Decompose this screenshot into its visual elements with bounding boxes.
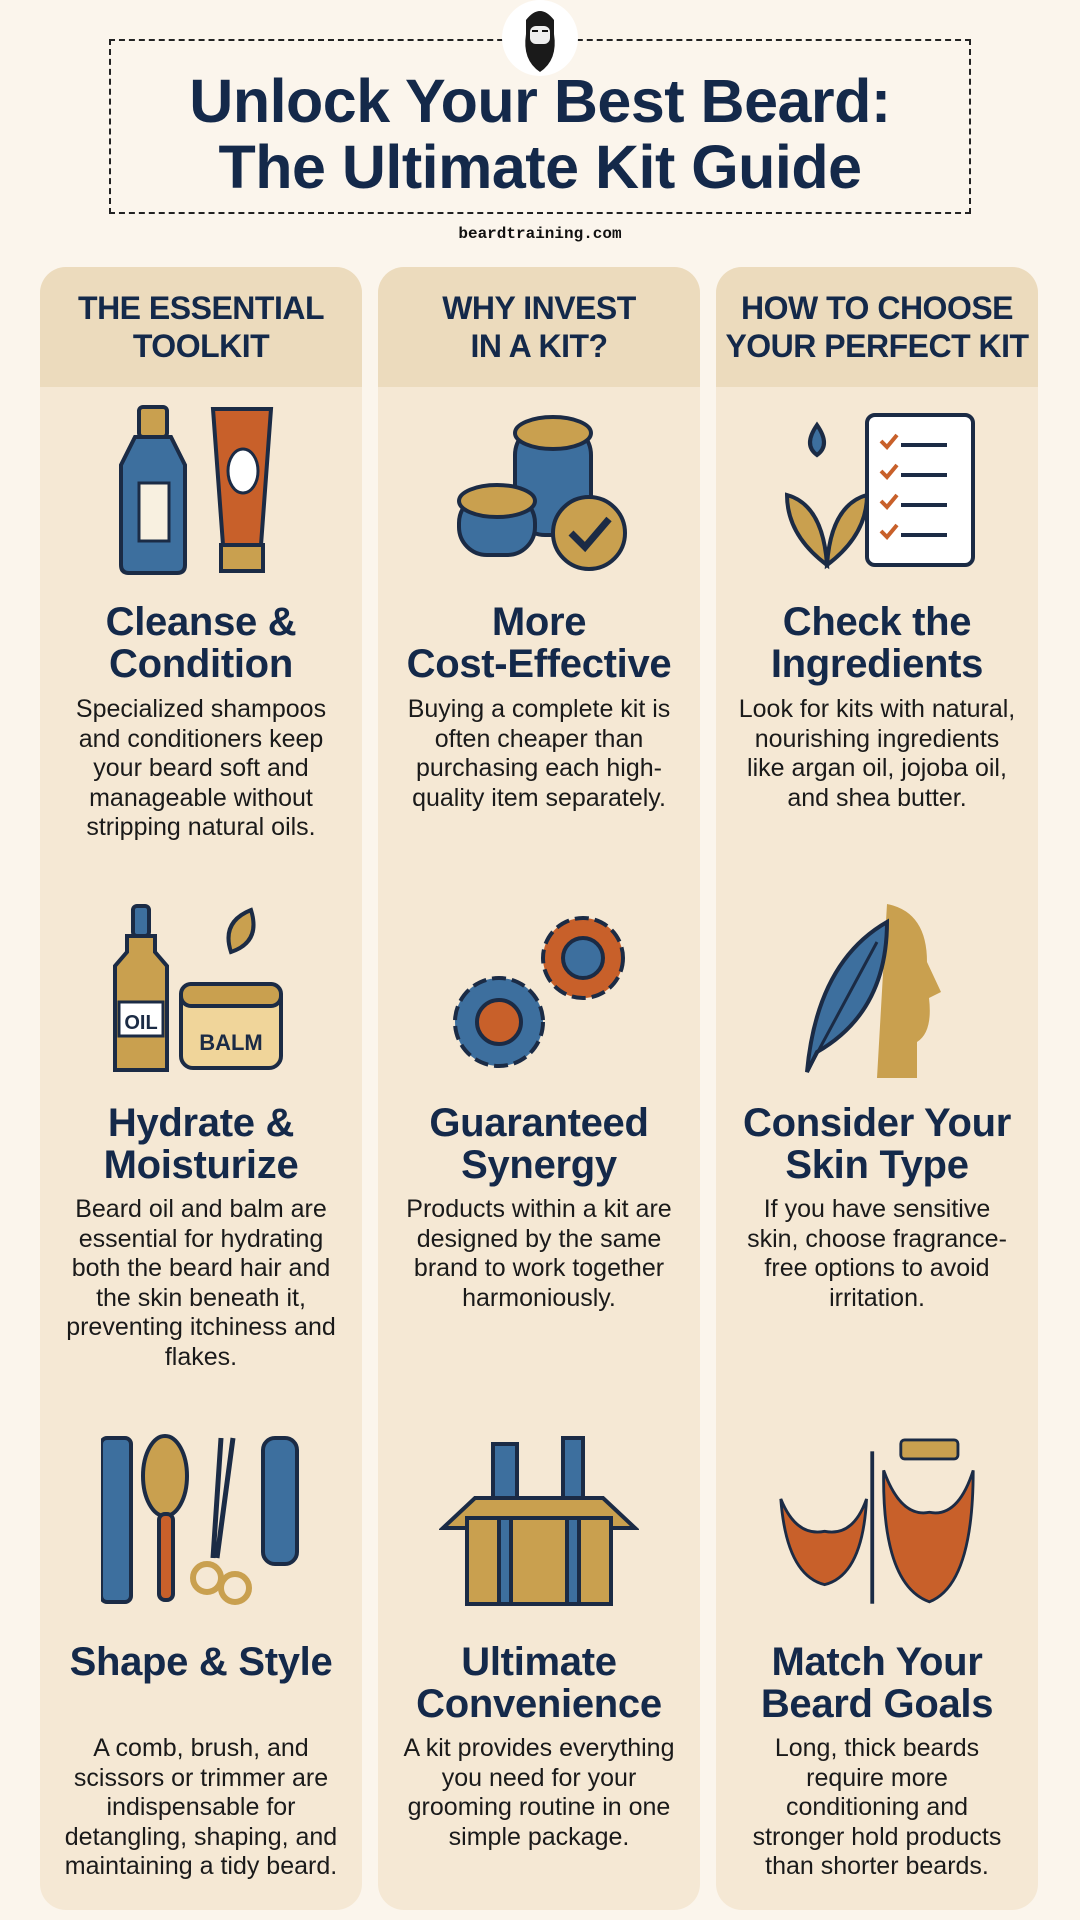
- header: how to choose: HOW TO CHOOSE: [741, 290, 1013, 326]
- heading: convenience: [416, 1640, 662, 1726]
- text: ingredients: Look for kits with natural, nourishing ingredients like argan oil, jojoba oil, and shea butter.: [739, 695, 1015, 812]
- heading: skin type: [743, 1101, 1011, 1187]
- heading: skin type: Consider Your: [743, 1101, 1011, 1145]
- text: hydrate: Beard oil and balm are essential for hydrating both the beard hair and the skin beneath it, preventing itchiness and flakes.: [66, 1195, 336, 1370]
- header: why invest: [378, 267, 700, 387]
- icon: shampoo bottles: [119, 405, 274, 575]
- text: skin type: If you have sensitive skin, choose fragrance-free options to avoid irritation.: [747, 1195, 1007, 1312]
- heading: cost: Cost-Effective: [407, 642, 671, 686]
- heading: beard goals: Beard Goals: [761, 1682, 993, 1726]
- heading: cleanse: Condition: [109, 642, 293, 686]
- icon: beard styles: [779, 1438, 975, 1604]
- header: how to choose: YOUR PERFECT KIT: [725, 328, 1029, 364]
- text: synergy: Products within a kit are designed by the same brand to work together harmoniously.: [406, 1195, 672, 1312]
- heading: hydrate: Hydrate &: [108, 1101, 294, 1145]
- heading: beard goals: [761, 1640, 993, 1726]
- icon: open box: [439, 1436, 639, 1606]
- header: how to choose: [716, 267, 1038, 387]
- heading: convenience: Ultimate: [461, 1640, 617, 1684]
- heading: ingredients: [771, 600, 983, 686]
- heading: synergy: [429, 1101, 649, 1187]
- website url: beardtraining.com: [458, 225, 622, 243]
- heading: hydrate: Moisturize: [104, 1143, 298, 1187]
- icon: feather and face: [805, 904, 941, 1078]
- heading: synergy: Guaranteed: [429, 1101, 649, 1145]
- heading: convenience: Convenience: [416, 1682, 662, 1726]
- heading: cleanse: Cleanse &: [106, 600, 296, 644]
- text: convenience: A kit provides everything you need for your grooming routine in one simple package.: [404, 1734, 674, 1850]
- icon: oil and balm: [113, 904, 283, 1072]
- heading: cost: More: [492, 600, 586, 644]
- header: why invest: WHY INVEST: [442, 290, 636, 326]
- panel: why invest: [378, 267, 700, 1910]
- panel: essential toolkit: [40, 267, 362, 1910]
- heading: cleanse: [106, 600, 296, 686]
- heading: ingredients: Ingredients: [771, 642, 983, 686]
- icon: gears: [453, 916, 625, 1068]
- heading: beard goals: Match Your: [771, 1640, 983, 1684]
- heading: cost: [407, 600, 671, 686]
- header: why invest: IN A KIT?: [470, 328, 608, 364]
- heading: synergy: Synergy: [461, 1143, 617, 1187]
- heading: hydrate: [104, 1101, 298, 1187]
- heading: shape: Shape & Style: [70, 1640, 332, 1684]
- icon: coins with check: [457, 415, 627, 571]
- header: essential toolkit: [40, 267, 362, 387]
- header: essential toolkit: TOOLKIT: [133, 328, 269, 364]
- text: cost: Buying a complete kit is often cheaper than purchasing each high-quality item separately.: [408, 695, 670, 812]
- heading: ingredients: Check the: [783, 600, 971, 644]
- title box: [109, 39, 971, 214]
- icon: oil and balm: BALM: [199, 1030, 263, 1055]
- title: [189, 66, 891, 200]
- icon: bearded man avatar: [502, 0, 578, 76]
- icon: oil and balm: OIL: [124, 1012, 158, 1034]
- text: beard goals: Long, thick beards require more conditioning and stronger hold products than shorter beards.: [753, 1734, 1001, 1880]
- title: Unlock Your Best Beard:: [189, 66, 891, 134]
- heading: skin type: Skin Type: [785, 1143, 969, 1187]
- header: essential toolkit: THE ESSENTIAL: [78, 290, 324, 326]
- text: shape: A comb, brush, and scissors or trimmer are indispensable for detangling, shaping, and maintaining a tidy beard.: [65, 1734, 337, 1880]
- panel: how to choose: [716, 267, 1038, 1910]
- text: cleanse: Specialized shampoos and conditioners keep your beard soft and manageable without stripping natural oils.: [76, 695, 326, 841]
- icon: comb brush scissors trimmer: [101, 1434, 299, 1605]
- icon: leaf and checklist: [785, 413, 975, 570]
- title: The Ultimate Kit Guide: [218, 132, 862, 200]
